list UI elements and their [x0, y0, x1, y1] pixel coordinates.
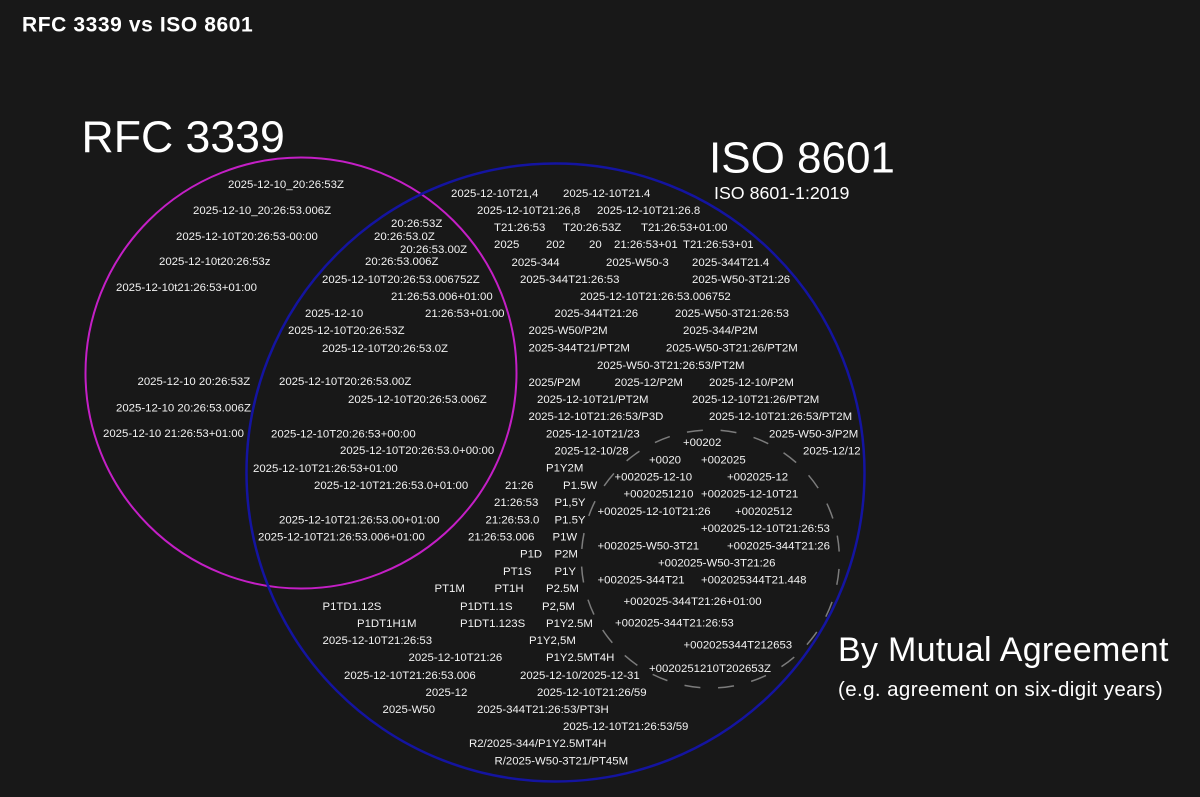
text group: formats in both standards: 2025-12-10T20:26:53+00:00	[271, 428, 416, 440]
heading: By Mutual Agreement: By Mutual Agreement	[838, 631, 1169, 669]
text group: by mutual agreement formats: +002025-W50-3T21	[598, 540, 699, 552]
text group: ISO 8601 only formats: 2025-W50	[382, 704, 435, 716]
text group: formats in both standards: 2025-12-10T20:26:53.006752Z	[322, 274, 480, 286]
text group: ISO 8601 only formats: T21:26:53+01:00	[641, 222, 727, 234]
text group: ISO 8601 only formats: P2.5M	[546, 583, 579, 595]
text group: RFC 3339 only formats: 2025-12-10 20:26:53Z	[138, 376, 250, 388]
text group: RFC 3339 only formats	[103, 179, 344, 440]
text group: formats in both standards: 2025-12-10	[305, 308, 363, 320]
text group: ISO 8601 only formats: 2025-W50-3T21:26	[692, 274, 790, 286]
text group: ISO 8601 only formats: P1.5Y	[554, 514, 586, 526]
title: RFC 3339 vs ISO 8601	[22, 14, 253, 36]
text group: by mutual agreement formats: +002025-344T21:26	[727, 540, 830, 552]
text group: ISO 8601 only formats: P1W	[552, 532, 577, 544]
text group: ISO 8601 only formats: 2025-W50-3T21:26/PT2M	[666, 342, 798, 354]
text group: ISO 8601 only formats: P1,5Y	[554, 497, 586, 509]
text group: ISO 8601 only formats: P1D	[520, 548, 542, 560]
text group: by mutual agreement formats: +00202512	[735, 506, 792, 518]
text group: ISO 8601 only formats: 20	[589, 239, 602, 251]
heading: RFC 3339: RFC 3339	[82, 113, 285, 162]
text group: ISO 8601 only formats: 2025-344T21:26:53	[520, 274, 619, 286]
text group: by mutual agreement formats: +002025-12-10T21	[701, 488, 798, 500]
text group: formats in both standards: 20:26:53.006Z	[365, 256, 439, 268]
text group: ISO 8601 only formats: 2025	[494, 239, 519, 251]
text group: ISO 8601 only formats: 21:26:53.0	[486, 514, 539, 526]
text group: ISO 8601 only formats: P1Y2,5M	[529, 635, 576, 647]
text group: ISO 8601 only formats: 2025-344	[512, 257, 560, 269]
text group: by mutual agreement formats: +0020	[649, 454, 681, 466]
text group: by mutual agreement formats	[598, 437, 830, 675]
text group: ISO 8601 only formats: 21:26:53	[494, 497, 538, 509]
text group: by mutual agreement formats: +002025344T212653	[684, 640, 792, 652]
text group: ISO 8601 only formats: 2025-W50/P2M	[528, 325, 608, 337]
text group: formats in both standards: 21:26:53.006+01:00	[391, 291, 493, 303]
text group: ISO 8601 only formats: P1.5W	[563, 480, 597, 492]
text group: ISO 8601 only formats: 2025-12-10/2025-12-31	[520, 670, 640, 682]
text group: formats in both standards: 2025-12-10T21:26:53.00+01:00	[279, 514, 440, 526]
text group: ISO 8601 only formats: P1Y2M	[546, 462, 583, 474]
text group: ISO 8601 only formats: 2025-12/P2M	[614, 377, 683, 389]
text group: RFC 3339 only formats: 2025-12-10 20:26:53.006Z	[116, 402, 251, 414]
text group: ISO 8601 only formats: 21:26:53+01	[614, 239, 678, 251]
text group: ISO 8601 only formats: 2025-344T21.4	[692, 257, 769, 269]
text group: by mutual agreement formats: +0020251210T202653Z	[649, 663, 771, 675]
text group: formats in both standards	[253, 218, 504, 544]
text group: ISO 8601 only formats: 2025-12-10T21/23	[546, 428, 640, 440]
text group: ISO 8601 only formats: 202	[546, 239, 565, 251]
text group: RFC 3339 only formats: 2025-12-10T20:26:53-00:00	[176, 231, 318, 243]
text group: ISO 8601 only formats: 2025-12-10T21.4	[563, 188, 650, 200]
text group: by mutual agreement formats: +002025-344T21:26+01:00	[624, 596, 762, 608]
text group: ISO 8601 only formats: T21:26:53	[494, 222, 545, 234]
text group: by mutual agreement formats: +002025-W50-3T21:26	[658, 558, 775, 570]
text group: by mutual agreement formats: +002025344T21.448	[701, 574, 806, 586]
text group: formats in both standards: 21:26:53+01:00	[425, 308, 504, 320]
text group: ISO 8601 only formats: R/2025-W50-3T21/PT45M	[494, 756, 628, 768]
text group: ISO 8601 only formats: P2M	[554, 548, 578, 560]
text group: ISO 8601 only formats: P1TD1.12S	[322, 601, 382, 613]
text group: ISO 8601 only formats: T21:26:53+01	[683, 239, 754, 251]
text group: ISO 8601 only formats: P1DT1.123S	[460, 618, 526, 630]
text group: ISO 8601 only formats: 2025-12-10/28	[554, 446, 629, 458]
text group: ISO 8601 only formats: 2025-12-10T21:26:53	[322, 635, 432, 647]
text group: ISO 8601 only formats: 2025-12-10T21:26:53/PT2M	[709, 411, 852, 423]
text group: formats in both standards: 2025-12-10T21:26:53.0+01:00	[314, 480, 468, 492]
text group: ISO 8601 only formats: 2025-12-10T21:26,8	[477, 205, 580, 217]
text group: RFC 3339 only formats: 2025-12-10_20:26:53.006Z	[193, 205, 331, 217]
text group: ISO 8601 only formats: 2025-12-10T21:26:53/59	[563, 721, 688, 733]
text group: ISO 8601 only formats: 2025-12-10T21/PT2M	[537, 394, 648, 406]
text group: formats in both standards: 2025-12-10T20:26:53.006Z	[348, 394, 487, 406]
text group: ISO 8601 only formats: 2025-W50-3T21:26:53	[675, 308, 789, 320]
caption: six-digit years: (e.g. agreement on six-digit years)	[838, 678, 1163, 701]
text group: ISO 8601 only formats: 2025-W50-3/P2M	[769, 428, 858, 440]
text group: by mutual agreement formats: +00202	[683, 437, 721, 449]
text group: ISO 8601 only formats: 2025-344T21:26:53/PT3H	[477, 704, 609, 716]
text group: ISO 8601 only formats: PT1M	[434, 583, 465, 595]
text group: by mutual agreement formats: +002025	[701, 454, 746, 466]
text group: ISO 8601 only formats: P1Y2.5M	[546, 618, 593, 630]
text group: ISO 8601 only formats: 2025-12-10T21,4	[451, 188, 538, 200]
text group: ISO 8601 only formats: T20:26:53Z	[563, 222, 621, 234]
text group: ISO 8601 only formats: 21:26	[505, 480, 534, 492]
text group: by mutual agreement formats: +002025-12-10T21:26:53	[701, 523, 830, 535]
text group: RFC 3339 only formats: 2025-12-10 21:26:53+01:00	[103, 428, 244, 440]
circle: by mutual agreement	[581, 430, 839, 688]
text group: ISO 8601 only formats: P1DT1H1M	[357, 618, 417, 630]
text group: RFC 3339 only formats: 2025-12-10t20:26:53z	[159, 256, 271, 268]
text group: ISO 8601 only formats: 2025-W50-3	[606, 257, 669, 269]
text group: RFC 3339 only formats: 2025-12-10t21:26:53+01:00	[116, 282, 257, 294]
text group: ISO 8601 only formats: 2025-12-10/P2M	[709, 377, 794, 389]
text group: by mutual agreement formats: +002025-12-10	[614, 472, 692, 484]
text group: by mutual agreement formats: +0020251210	[624, 488, 694, 500]
text group: ISO 8601 only formats	[322, 188, 861, 768]
text group: formats in both standards: 2025-12-10T20:26:53.00Z	[279, 376, 411, 388]
text group: ISO 8601 only formats: 2025-12-10T21:26:53.006752	[580, 291, 731, 303]
circle: ISO 8601	[246, 164, 864, 782]
text group: by mutual agreement formats: +002025-12-10T21:26	[598, 506, 711, 518]
text group: ISO 8601 only formats: 2025-12-10T21:26	[408, 652, 502, 664]
text group: ISO 8601 only formats: 2025-12/12	[803, 446, 861, 458]
text group: formats in both standards: 20:26:53.00Z	[400, 244, 467, 256]
text group: ISO 8601 only formats: 2025-12-10T21:26:53.006	[344, 670, 476, 682]
text group: ISO 8601 only formats: PT1S	[503, 566, 532, 578]
text group: ISO 8601 only formats: 2025-344T21:26	[554, 308, 638, 320]
text group: RFC 3339 only formats: 2025-12-10_20:26:53Z	[228, 179, 344, 191]
subheading: ISO 8601-1:2019: ISO 8601-1:2019	[714, 183, 850, 203]
text group: ISO 8601 only formats: 21:26:53.006	[468, 532, 535, 544]
text group: ISO 8601 only formats: PT1H	[494, 583, 524, 595]
heading: ISO 8601: ISO 8601	[709, 134, 895, 182]
text group: ISO 8601 only formats: 2025-12-10T21:26:53/P3D	[528, 411, 663, 423]
text group: formats in both standards: 2025-12-10T20:26:53.0+00:00	[340, 445, 494, 457]
text group: ISO 8601 only formats: R2/2025-344/P1Y2.5MT4H	[469, 738, 606, 750]
text group: formats in both standards: 20:26:53.0Z	[374, 231, 435, 243]
text group: ISO 8601 only formats: 2025-12	[426, 687, 467, 699]
text group: ISO 8601 only formats: 2025-344/P2M	[683, 325, 758, 337]
text group: formats in both standards: 2025-12-10T20:26:53.0Z	[322, 343, 448, 355]
text group: ISO 8601 only formats: 2025-12-10T21:26/59	[537, 687, 647, 699]
text group: ISO 8601 only formats: P1Y2.5MT4H	[546, 652, 614, 664]
text group: ISO 8601 only formats: P1Y	[554, 566, 576, 578]
text group: ISO 8601 only formats: 2025-12-10T21:26.8	[597, 205, 700, 217]
text group: formats in both standards: 20:26:53Z	[391, 218, 442, 230]
text group: ISO 8601 only formats: P2,5M	[542, 601, 575, 613]
text group: by mutual agreement formats: +002025-344T21:26:53	[615, 618, 734, 630]
text group: formats in both standards: 2025-12-10T21:26:53+01:00	[253, 463, 398, 475]
text group: ISO 8601 only formats: 2025-344T21/PT2M	[528, 342, 630, 354]
text group: formats in both standards: 2025-12-10T20:26:53Z	[288, 325, 405, 337]
text group: ISO 8601 only formats: 2025-12-10T21:26/PT2M	[692, 394, 819, 406]
text group: ISO 8601 only formats: 2025/P2M	[528, 377, 580, 389]
circle: RFC 3339	[86, 158, 516, 588]
text group: by mutual agreement formats: +002025-344T21	[598, 574, 685, 586]
text group: formats in both standards: 2025-12-10T21:26:53.006+01:00	[258, 532, 425, 544]
text group: by mutual agreement formats: +002025-12	[727, 472, 788, 484]
text group: ISO 8601 only formats: P1DT1.1S	[460, 601, 513, 613]
text group: ISO 8601 only formats: 2025-W50-3T21:26:53/PT2M	[597, 360, 745, 372]
